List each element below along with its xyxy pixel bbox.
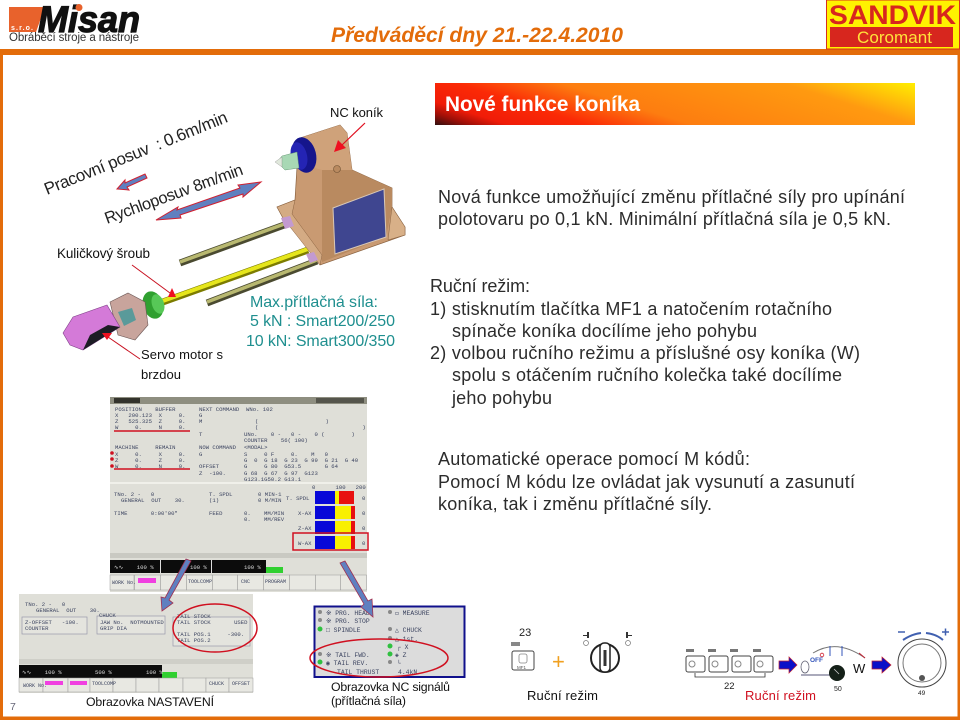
screenshot: setup screen: CHUCK: [99, 612, 116, 619]
screenshot: position screen: TOOLCOMP: [188, 579, 212, 585]
screenshot: NC signals panel: TAIL THRUST: [337, 669, 379, 676]
icon: handwheel: 49: [918, 690, 926, 697]
screenshot: NC signals panel: [314, 606, 464, 677]
icon: axis selector dial: [801, 646, 866, 693]
screenshot: setup screen: Z-OFFSET -100.: [25, 619, 79, 626]
logo: Sandvik Coromant: [826, 0, 960, 49]
screenshot: position screen: W-AX: [298, 540, 312, 547]
icon: handwheel: [898, 628, 949, 697]
text: manual mode: [430, 276, 860, 408]
screenshot: NC signals panel: ◈ Z: [395, 652, 407, 659]
page number: 7: [10, 701, 16, 713]
logo: Misan: Misan: [38, 0, 140, 40]
arrow: working feed direction: [117, 174, 147, 190]
screenshot: position screen: X 200.123 X 0.: [115, 412, 186, 419]
text: maximum thrust: Max.přítlačná síla:: [250, 294, 378, 311]
screenshot: setup screen: CHUCK: [209, 681, 224, 687]
label: servo motor with brake: Servo motor s: [141, 347, 224, 362]
screenshot: setup screen: TOOLCOMP: [92, 681, 116, 687]
screenshot: setup screen: JAW No. NOTMOUNTED: [100, 619, 164, 626]
screenshot: setup screen: TAIL STOCK USED: [177, 619, 248, 626]
label: servo motor with brake: brzdou: [141, 367, 181, 382]
screenshot: position screen: UNo. 0 - 0 - 0 ( ): [244, 431, 355, 438]
screenshot: position screen: TIME 0:00'00": [114, 510, 178, 517]
screenshot: position screen: 0 M/MIN: [258, 497, 282, 504]
screenshot: position screen: T: [199, 431, 203, 438]
text: manual mode: 1) stisknutím tlačítka MF1 a natočením rotačního: [430, 299, 832, 319]
screenshot: position screen: COUNTER 56( 100): [244, 437, 308, 444]
screenshot: position screen: ( ): [255, 418, 329, 425]
screenshot: position screen: GENERAL OUT 30.: [121, 497, 185, 504]
text: automatic operation: Pomocí M kódu lze ovládat jak vysunutí a zasunutí: [438, 472, 855, 492]
arrow: position screen to NC signals: [340, 561, 373, 617]
screenshot: position screen: ( ): [255, 424, 366, 431]
icon: feed rate buttons: [686, 649, 773, 692]
text: manual mode: jeho pohybu: [451, 388, 552, 408]
illustration: NC tailstock: [275, 125, 405, 265]
screenshot: position screen: 0: [362, 510, 366, 517]
screenshot: position screen: Z-AX: [298, 525, 312, 532]
screenshot: setup screen: ∿∿ 100 %: [22, 669, 62, 676]
arrow: ball screw pointer: [132, 265, 176, 297]
screenshot: setup screen: GRIP DIA: [100, 625, 127, 632]
text: automatic operation: koníka, tak i změnu přítlačné síly.: [438, 494, 712, 514]
screenshot: position screen: MACHINE REMAIN: [115, 444, 175, 451]
label: ball screw: Kuličkový šroub: [57, 246, 150, 261]
screenshot: NC signals panel: ※ PRG. HEAD: [326, 610, 370, 617]
arrow: position screen to setup screen: [161, 559, 191, 611]
screenshot: position screen: Z -100.: [199, 470, 226, 477]
screenshot: position screen: G 0 G 18 G 23 G 99 G 21 G 40: [244, 457, 359, 464]
label: rapid traverse: Rychloposuv 8m/min: [102, 161, 246, 228]
highlights: screen red markers: [110, 431, 368, 550]
screenshot: setup screen: TAIL POS.1 -300.: [177, 631, 244, 638]
screenshot: position screen: NEXT COMMAND WNo. 102: [199, 406, 273, 413]
screenshot: position screen: NOW COMMAND: [199, 444, 237, 451]
text: manual mode: Ruční režim:: [430, 276, 530, 296]
screenshot: position screen: T. SPDL: [286, 495, 310, 502]
heading: Nové funkce koníka: Nové funkce koníka: [445, 93, 640, 116]
screenshot: position screen: 0: [362, 525, 366, 532]
icon: MF1 button: 23: [519, 627, 531, 639]
logo: Sandvik Coromant: Coromant: [857, 28, 932, 47]
text: automatic operation: Automatické operace pomocí M kódů:: [438, 449, 750, 469]
icon: MF1 button: [511, 627, 534, 670]
caption: NC signals screen: Obrazovka NC signálů: [331, 680, 450, 694]
screenshot: NC signals panel: 4.4kN: [398, 669, 417, 676]
text: maximum thrust: 5 kN : Smart200/250: [250, 313, 395, 330]
icon: axis selector dial: OFF: [810, 657, 823, 664]
icon: axis selector dial: 50: [834, 686, 842, 693]
screenshot: position screen: Z 0. Z 0.: [115, 457, 186, 464]
text: maximum thrust: 10 kN: Smart300/350: [246, 333, 395, 350]
icon: rotary switch: [583, 632, 632, 672]
screenshot: position screen: PROGRAM: [265, 579, 286, 585]
label: NC tailstock: NC koník: [330, 105, 384, 120]
screenshot: position screen: G G 80 G53.5 G 64: [244, 463, 339, 470]
screenshot: position screen: W 0. N 0.: [115, 424, 186, 431]
screenshot: position screen: 100 %: [190, 564, 207, 571]
screenshot: setup screen: WORK No.: [23, 683, 47, 689]
screenshot: position screen: M: [199, 418, 202, 425]
text: maximum thrust: [246, 294, 395, 350]
screenshot: NC signals panel: △ CHUCK: [395, 627, 422, 634]
text: manual mode: spínače koníka docílíme jeho pohybu: [452, 321, 757, 341]
screenshot: position screen: 0.: [244, 516, 251, 523]
screenshot: NC signals panel: ※ PRG. STOP: [326, 618, 370, 625]
screenshot: setup screen: TAIL STOCK: [177, 613, 211, 620]
caption: manual mode red: Ruční režim: [745, 688, 816, 703]
screenshot: position screen: ∿∿ 100 %: [114, 564, 154, 571]
screenshot: position screen: Z 525.325 Z 0.: [115, 418, 186, 425]
screenshot: position screen: MM/REV: [264, 516, 285, 523]
icon: axis selector dial: W: [853, 661, 866, 676]
screenshot: position screen: T. SPDL: [209, 491, 232, 498]
highlight: tail signals ellipse: [310, 639, 448, 677]
screenshot: position screen: G: [199, 412, 203, 419]
screenshot: position screen: 0 MIN-1: [258, 491, 282, 498]
screenshot: setup screen: TNo. 2 - 0: [25, 601, 66, 608]
highlight: tail stock ellipse: [173, 604, 257, 652]
screenshot: position screen: X 0. X 0.: [115, 451, 186, 458]
screenshot: position screen: 0.: [244, 510, 251, 517]
screenshot: NC signals panel: └: [397, 659, 401, 667]
text: new feature description: [438, 187, 905, 229]
screenshot: position screen: MM/MIN: [264, 510, 284, 517]
screenshot: NC signals panel: ▭ MEASURE: [395, 610, 430, 617]
caption: manual mode black: Ruční režim: [527, 688, 598, 703]
screenshot: position screen: W 0. N 0.: [115, 463, 186, 470]
screenshot: position screen: G: [199, 451, 203, 458]
screenshot: position screen: 0 100 200: [312, 484, 366, 491]
screenshot: setup screen: GENERAL OUT 30.: [36, 607, 100, 614]
icon: MF1 button: MF1: [517, 665, 526, 670]
screenshot: setup screen: [19, 594, 253, 693]
text: manual mode: spolu s otáčením ručního kolečka také docílíme: [452, 365, 842, 385]
screenshot: position screen: (1): [209, 497, 219, 504]
caption: setup screen: Obrazovka NASTAVENÍ: [86, 694, 215, 709]
arrow: buttons to axis selector: [779, 657, 797, 673]
arrow: servo motor pointer: [102, 333, 140, 359]
arrow: NC tailstock pointer: [334, 123, 365, 152]
logo: Misan: s.r.o.: [11, 25, 33, 32]
screenshot: position screen: TNo. 2 - 0: [114, 491, 155, 498]
screenshot: setup screen: TAIL POS.2: [177, 637, 211, 644]
label: servo motor with brake: [141, 347, 224, 382]
screenshot: NC signals panel: ※ TAIL FWD.: [326, 652, 370, 659]
icon: feed rate buttons: 22: [724, 681, 735, 692]
screenshot: position screen: WORK No.: [112, 580, 136, 586]
illustration: ball screw and rails: [160, 223, 317, 303]
caption: NC signals screen: (přítlačná síla): [331, 694, 406, 708]
screenshot: setup screen: OFFSET: [232, 681, 250, 687]
text: automatic operation: [438, 449, 855, 514]
screenshot: NC signals panel: ┌ X: [397, 644, 409, 652]
illustration: servo motor and coupling: [63, 289, 167, 350]
screenshot: NC signals panel: ◉ TAIL REV.: [326, 660, 368, 667]
screenshot: position screen: X-AX: [298, 510, 312, 517]
screenshot: position screen: 0: [362, 495, 366, 502]
arrow: rapid traverse direction: [156, 182, 261, 220]
screenshot: position screen: OFFSET: [199, 463, 220, 470]
screenshot: position screen: S 0 F 0. M 0: [244, 451, 329, 458]
screenshot: position screen: G123.1G50.2 G13.1: [244, 476, 302, 483]
logo: Sandvik Coromant: SANDVIK: [829, 0, 957, 30]
screenshot: setup screen: 100 %: [146, 669, 163, 676]
screenshot: position screen: POSITION BUFFER: [115, 406, 176, 413]
text: new feature description: Nová funkce umožňující změnu přítlačné síly pro upínání: [438, 187, 905, 207]
heading: Nové funkce koníka: [435, 83, 915, 125]
screenshot: position screen: CNC: [241, 579, 250, 585]
arrow: axis selector to handwheel: [872, 657, 891, 673]
label: working feed: Pracovní posuv : 0.6m/min: [41, 108, 230, 199]
screenshot: position screen: 0: [362, 540, 366, 547]
icon: plus sign: +: [552, 649, 565, 674]
logo: Misan: [9, 0, 140, 44]
screenshot: NC signals panel: □ SPINDLE: [326, 627, 361, 634]
screenshot: setup screen: 500 %: [95, 669, 112, 676]
logo: Misan: Obráběcí stroje a nástroje: [9, 32, 139, 44]
text: manual mode: 2) volbou ručního režimu a příslušné osy koníka (W): [430, 343, 860, 363]
text: new feature description: polotovaru po 0,1 kN. Minimální přítlačná síla je 0,5 kN.: [438, 209, 891, 229]
screenshot: position screen: [110, 397, 367, 592]
caption: NC signals screen: [331, 680, 450, 708]
title: event dates: Předváděcí dny 21.-22.4.2010: [331, 24, 623, 47]
screenshot: position screen: G 68 G 67 G 97 G123: [244, 470, 318, 477]
screenshot: position screen: <MODAL>: [244, 444, 268, 451]
screenshot: NC signals panel: △ 1st.: [395, 636, 418, 643]
screenshot: position screen: 100 %: [244, 564, 261, 571]
screenshot: setup screen: COUNTER: [25, 625, 49, 632]
screenshot: position screen: FEED: [209, 510, 223, 517]
